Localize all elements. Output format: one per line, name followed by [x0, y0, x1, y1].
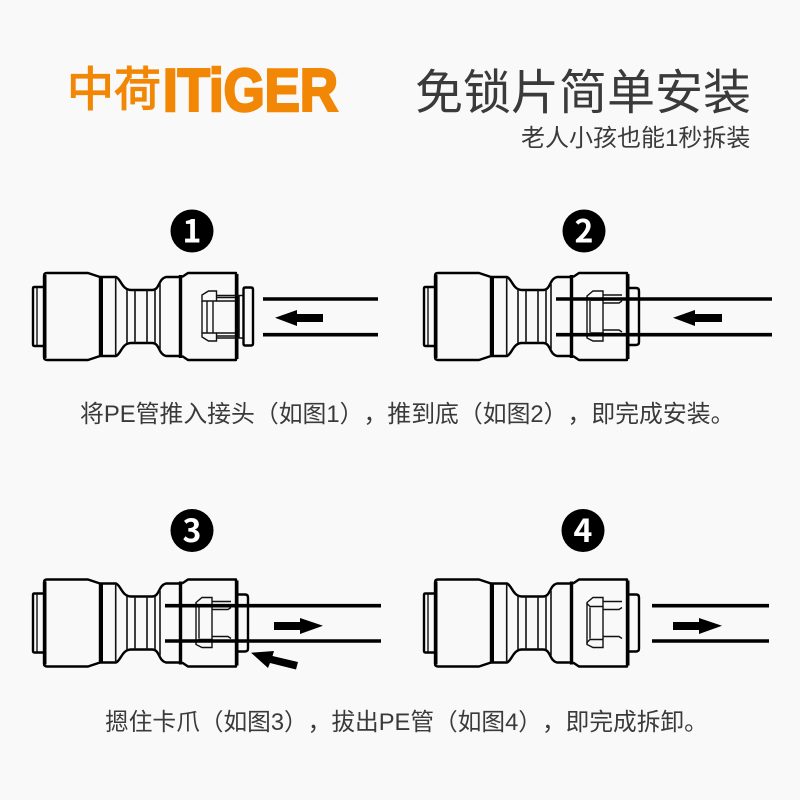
pipe	[652, 606, 769, 641]
logo: 中荷 ITIGER: ITiGER	[163, 57, 338, 124]
step badge 2: 2	[575, 206, 593, 252]
pipe	[165, 606, 381, 641]
step badge 4	[562, 506, 604, 552]
connector	[33, 273, 253, 360]
step badge 4: 4	[574, 506, 592, 552]
caption: removal: 摁住卡爪（如图3），拔出PE管（如图4），即完成拆卸。	[105, 709, 708, 736]
step badge 1	[170, 206, 214, 252]
subtitle: 老人小孩也能1秒拆装	[521, 125, 750, 152]
connector	[424, 273, 639, 360]
logo: 中荷 ITIGER	[67, 57, 338, 124]
step badge 3: 3	[183, 506, 201, 552]
arrow: left	[673, 310, 722, 326]
arrow: right	[673, 618, 722, 634]
pipe	[263, 299, 378, 335]
diagram 1: connector with pipe approaching	[33, 273, 378, 360]
step badge 1: 1	[183, 206, 201, 252]
arrow: right	[274, 618, 323, 634]
step badge 2	[562, 206, 606, 252]
connector	[33, 580, 248, 666]
connector	[424, 580, 639, 666]
arrow: press collet	[251, 651, 298, 670]
arrow: left	[275, 310, 323, 326]
logo: 中荷 ITIGER: 中荷	[67, 63, 161, 116]
diagram 2: pipe fully inserted	[424, 273, 772, 360]
step badge 3	[170, 506, 214, 552]
pipe	[556, 299, 772, 335]
diagram 4: pipe removed	[424, 580, 769, 666]
diagram 3: press collet and pull pipe	[33, 580, 381, 670]
title: 免锁片简单安装	[415, 67, 751, 120]
caption: installation: 将PE管推入接头（如图1），推到底（如图2），即完成安装。	[80, 401, 734, 428]
